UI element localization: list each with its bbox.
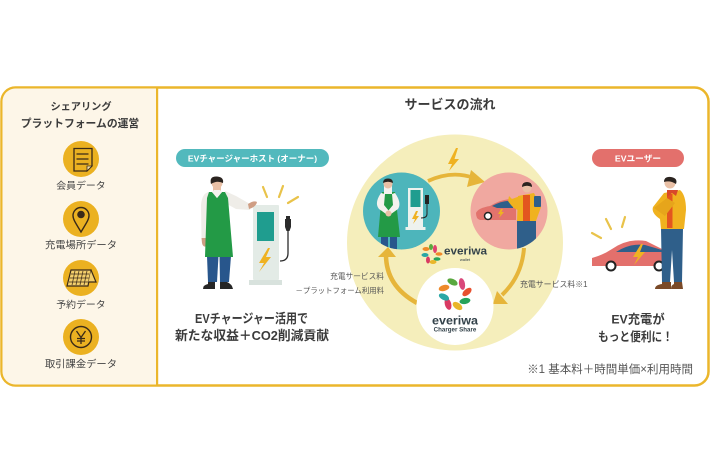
car <box>592 240 664 266</box>
pill: EV user <box>592 149 684 167</box>
label: charging service fee: 充電サービス料※1 <box>520 279 588 289</box>
icon: member data document <box>63 141 99 177</box>
label: transaction billing data: 取引課金データ <box>45 358 117 370</box>
icon: reservation calendar <box>63 260 99 296</box>
pill: EV user: EVユーザー <box>615 154 661 164</box>
text: user benefit: EV充電が <box>611 312 665 326</box>
diagram: service cycle <box>347 134 563 350</box>
background circle <box>347 134 563 350</box>
heading: platform operations <box>21 100 139 130</box>
sparkle <box>592 217 625 238</box>
arrow: platform to host <box>378 247 417 303</box>
icon: charging location pin <box>63 201 99 237</box>
heading: platform operations: プラットフォームの運営 <box>21 116 139 130</box>
person <box>201 192 209 238</box>
text: host benefit <box>175 311 329 343</box>
illustration: host with charger <box>201 176 298 289</box>
charger <box>253 205 279 280</box>
text: user benefit: もっと便利に！ <box>598 329 673 344</box>
text: host benefit: 新たな収益＋CO2削減貢献 <box>175 328 329 343</box>
circle: everiwa charger share: everiwa <box>432 316 479 328</box>
circle: everiwa charger share: Charger Share <box>434 326 477 334</box>
circle: host <box>363 172 440 250</box>
pill: EV charger host <box>176 149 329 167</box>
arrow: host to user <box>428 170 485 187</box>
icon: lightning <box>448 148 459 171</box>
label: reservation data: 予約データ <box>56 298 106 311</box>
heading: platform operations: シェアリング <box>50 100 112 113</box>
label: charging service and platform fee: 充電サービス料 <box>330 271 384 281</box>
label: charging service and platform fee: －プラットフォーム利用料 <box>296 286 385 295</box>
text: user benefit <box>598 312 673 344</box>
illustration: EV user with car <box>592 177 686 289</box>
logo: everiwa wallet <box>422 244 488 264</box>
text: host benefit: EVチャージャー活用で <box>195 311 308 326</box>
circle: user <box>470 172 548 251</box>
heading: service flow: サービスの流れ <box>404 97 496 112</box>
pill: EV charger host: EVチャージャーホスト (オーナー) <box>188 154 317 164</box>
label: charging service and platform fee <box>296 271 385 295</box>
label: charging location data: 充電場所データ <box>45 238 117 252</box>
label: member data: 会員データ <box>56 179 106 192</box>
person <box>661 228 683 282</box>
sparkle <box>263 186 298 203</box>
footnote: ※1 基本料＋時間単価×利用時間 <box>527 362 693 376</box>
panel: platform operations <box>2 87 158 386</box>
arrow: user to platform <box>493 248 524 304</box>
icon: yen coin <box>63 319 99 355</box>
logo: everiwa wallet: everiwa <box>444 246 488 258</box>
circle: everiwa charger share <box>416 268 494 345</box>
logo: everiwa wallet: wallet <box>460 257 471 262</box>
outer frame <box>2 88 708 386</box>
